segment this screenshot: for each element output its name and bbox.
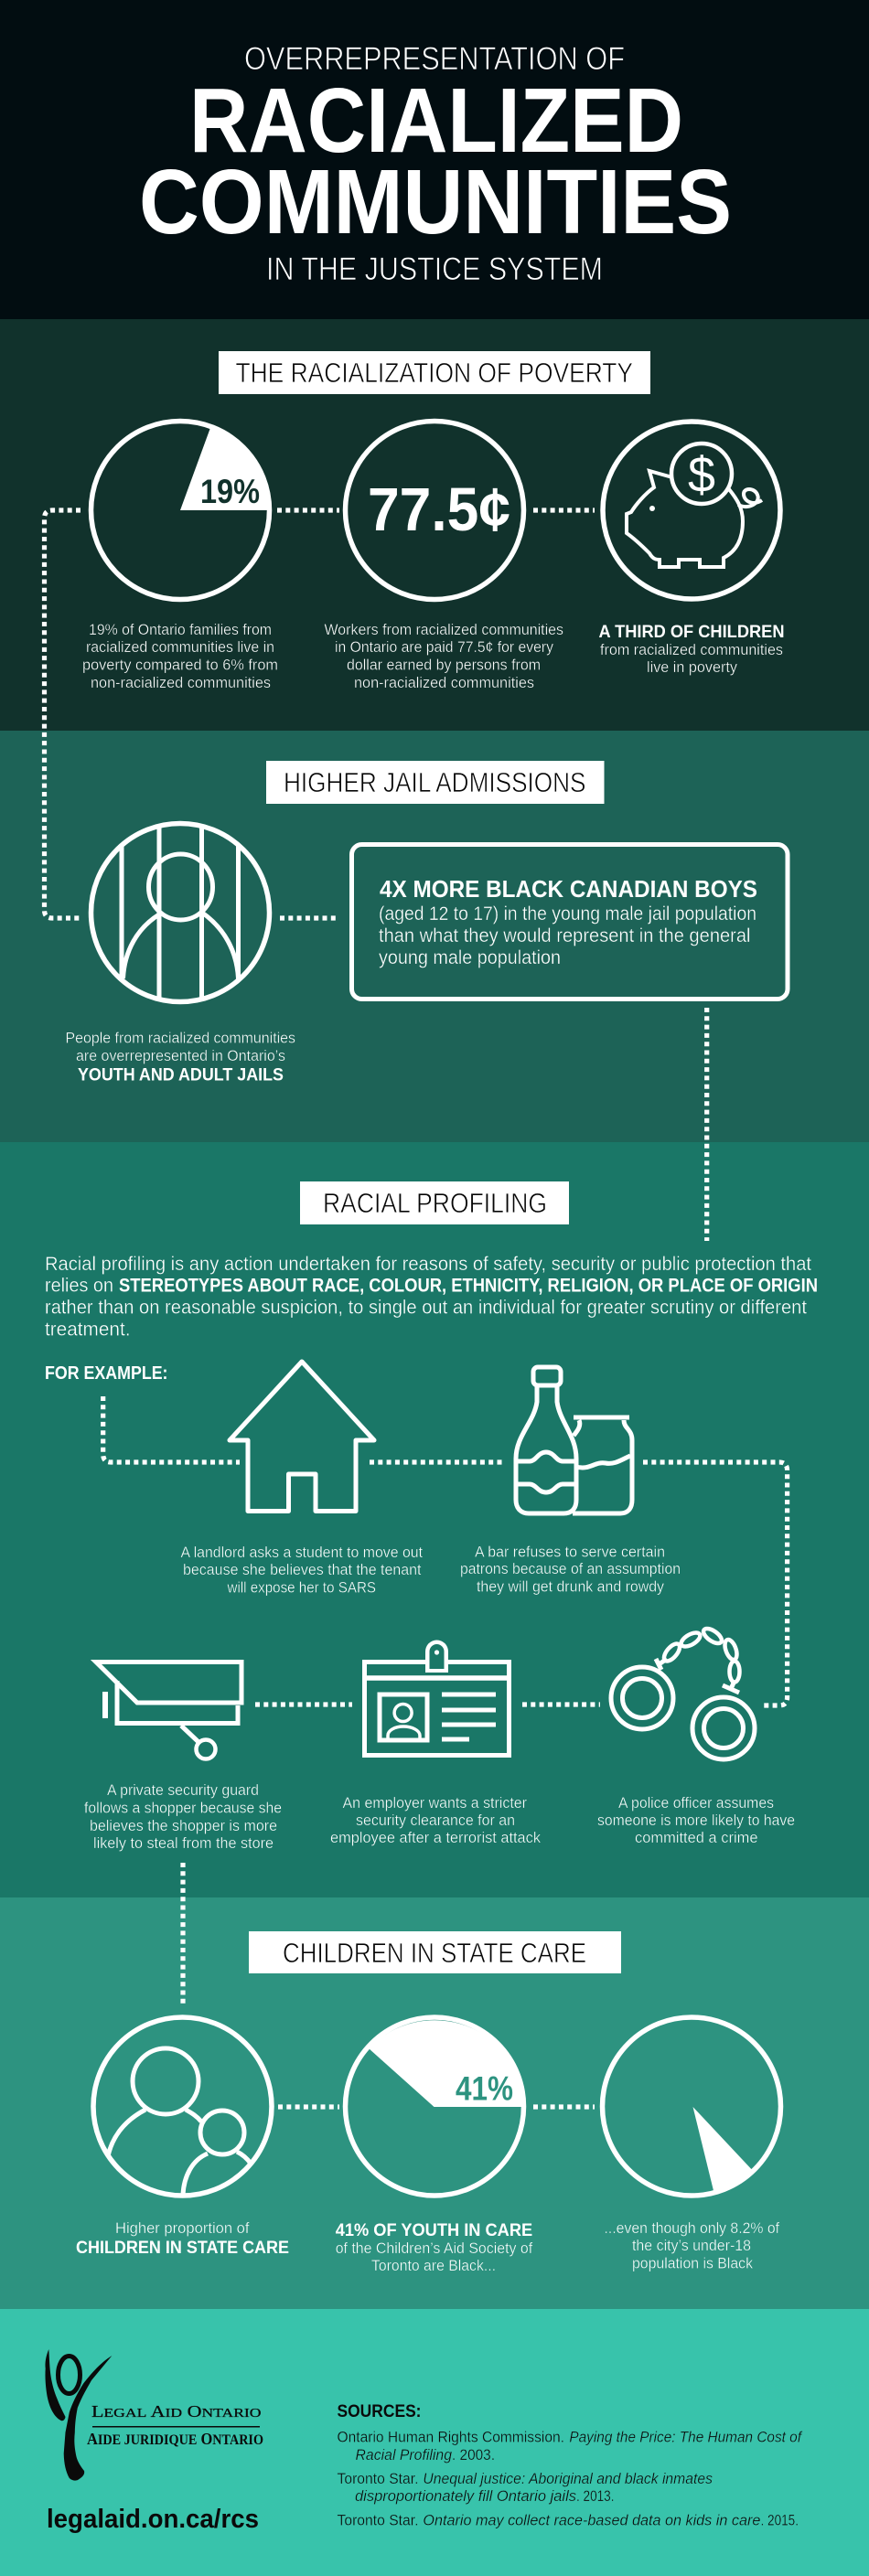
- sources: [337, 2401, 803, 2529]
- text: 41% of youth in care: of the Children’s Aid Society of: [336, 2240, 533, 2257]
- text: children in state care: Higher proportion of: [115, 2220, 250, 2237]
- connector: house to bottles: [370, 1459, 503, 1465]
- icon: parent and child: [93, 2017, 272, 2196]
- text: 19% of families: racialized communities live in: [86, 639, 274, 656]
- icon: piggy bank: [603, 422, 780, 599]
- text: children in state care: [76, 2220, 289, 2258]
- icon: security camera: [96, 1662, 241, 1759]
- text: landlord example: will expose her to SARS: [227, 1580, 376, 1597]
- heading: children in state care: [249, 1931, 621, 1973]
- connector: bottles to handcuffs: [643, 1462, 788, 1705]
- text: employer example: employee after a terrorist attack: [330, 1830, 542, 1846]
- text: security guard example: believes the shopper is more: [90, 1818, 277, 1834]
- text: police officer example: [597, 1795, 795, 1846]
- text: definition of racial profiling: relies on: [45, 1275, 113, 1297]
- connector: [277, 508, 339, 513]
- logo: legal aid ontario: LEGAL A ID O NTARIO: [91, 2402, 262, 2421]
- sources: Racial Profiling: [355, 2447, 453, 2464]
- text: a third of children: [598, 622, 785, 676]
- title: OVERREPRESENTATION OF: [244, 41, 625, 77]
- text: definition of racial profiling: [45, 1254, 818, 1341]
- icon: piggy bank: $: [688, 446, 715, 503]
- connector: [278, 2104, 339, 2110]
- panel: children in state care: [0, 1897, 869, 2309]
- callout: 4x more black canadian boys: than what they would represent in the general: [379, 925, 750, 946]
- sources: . 2013.: [576, 2488, 615, 2505]
- text: employer example: [330, 1795, 542, 1846]
- sources: disproportionately fill Ontario jails: [355, 2488, 576, 2505]
- text: workers paid 77.5 cents: in Ontario are paid 77.5¢ for every: [335, 639, 554, 656]
- icon: bottles: [516, 1367, 632, 1513]
- text: a third of children: live in poverty: [647, 659, 738, 676]
- heading: the racialization of poverty: THE RACIALIZATION OF POVERTY: [236, 357, 633, 389]
- icon: person behind bars: [91, 823, 269, 1002]
- text: overrepresented in jails: [66, 1030, 295, 1085]
- text: landlord example: [181, 1545, 423, 1597]
- sources: Ontario may collect race-based data on kids in care: [423, 2513, 760, 2529]
- title: IN THE JUSTICE SYSTEM: [266, 251, 603, 287]
- connector: [280, 915, 339, 921]
- heading: racial profiling: RACIAL PROFILING: [323, 1187, 547, 1219]
- icon: handcuffs: [611, 1626, 755, 1759]
- text: workers paid 77.5 cents: non-racialized communities: [354, 675, 534, 691]
- heading: higher jail admissions: HIGHER JAIL ADMISSIONS: [284, 766, 585, 798]
- panel: racial profiling: [0, 1142, 869, 1897]
- pie chart: 19%: 19%: [200, 473, 260, 510]
- sources: Unequal justice: Aboriginal and black inmates: [423, 2471, 713, 2487]
- text: 19% of families: [82, 622, 278, 691]
- heading: higher jail admissions: [266, 761, 604, 804]
- pie chart: 8.2%: [602, 2017, 781, 2196]
- text: a third of children: A THIRD OF CHILDREN: [598, 622, 785, 642]
- heading: children in state care: CHILDREN IN STATE CARE: [283, 1937, 586, 1969]
- text: security guard example: [84, 1782, 282, 1852]
- callout: 4x more black canadian boys: 4X MORE BLACK CANADIAN BOYS: [380, 875, 757, 903]
- sources: . 2003.: [452, 2447, 495, 2464]
- text: definition of racial profiling: treatment.: [45, 1319, 130, 1341]
- text: 19% of families: non-racialized communities: [91, 675, 271, 691]
- icon: id badge: [364, 1641, 509, 1756]
- heading: racial profiling: [300, 1181, 569, 1224]
- sources: Toronto Star.: [337, 2471, 419, 2487]
- callout: 4x more black canadian boys: [351, 845, 788, 999]
- logo: legal aid ontario: [45, 2349, 263, 2481]
- text: employer example: security clearance for an: [356, 1812, 515, 1829]
- text: 8.2% of under-18 population: ...even though only 8.2% of: [604, 2220, 779, 2237]
- title: [139, 41, 732, 287]
- text: 19% of families: poverty compared to 6% from: [82, 657, 278, 673]
- text: landlord example: A landlord asks a student to move out: [181, 1545, 423, 1561]
- connector: to house: [103, 1396, 240, 1462]
- callout: 4x more black canadian boys: (aged 12 to 17) in the young male jail population: [379, 903, 756, 925]
- pie chart: 41%: [346, 2017, 526, 2196]
- text: a third of children: from racialized communities: [600, 642, 783, 658]
- connector: camera to badge: [255, 1702, 352, 1707]
- sources: SOURCES:: [337, 2401, 421, 2421]
- heading: the racialization of poverty: [219, 351, 650, 394]
- pie chart: 19%: [91, 421, 272, 600]
- text: police officer example: committed a crime: [635, 1830, 757, 1846]
- callout: 4x more black canadian boys: young male population: [379, 947, 561, 968]
- text: 41% of youth in care: [336, 2220, 533, 2274]
- panel: higher jail admissions: [0, 731, 869, 1142]
- text: 41% of youth in care: Toronto are Black...: [371, 2258, 496, 2274]
- connector: [533, 508, 595, 513]
- connector: jail admissions to racial profiling: [704, 1008, 709, 1241]
- text: overrepresented in jails: YOUTH AND ADULT JAILS: [78, 1064, 284, 1085]
- text: overrepresented in jails: are overrepresented in Ontario’s: [76, 1048, 285, 1064]
- text: workers paid 77.5 cents: [324, 622, 563, 691]
- text: 19% of families: 19% of Ontario families from: [89, 622, 272, 638]
- pie chart: 41%: 41%: [456, 2070, 513, 2107]
- connector: poverty to jail admissions: [44, 510, 82, 918]
- icon: house: [230, 1362, 374, 1511]
- text: definition of racial profiling: rather than on reasonable suspicion, to single out an individual for greater scrutiny or different: [45, 1297, 807, 1319]
- text: bar example: patrons because of an assumption: [460, 1561, 681, 1577]
- text: overrepresented in jails: People from racialized communities: [66, 1030, 295, 1046]
- text: bar example: [460, 1544, 681, 1595]
- link: website: legalaid.on.ca/rcs: [47, 2505, 259, 2534]
- connector: [533, 2104, 595, 2110]
- panel: footer: [0, 2309, 869, 2576]
- text: definition of racial profiling: Racial profiling is any action undertaken for reasons of safety, security or public protection that: [45, 1254, 811, 1275]
- title: RACIALIZED: [189, 69, 683, 172]
- sources: Ontario Human Rights Commission.: [337, 2429, 564, 2445]
- text: workers paid 77.5 cents: dollar earned by persons from: [347, 657, 541, 673]
- text: 8.2% of under-18 population: the city’s under-18: [632, 2238, 751, 2254]
- sources: Toronto Star.: [337, 2513, 419, 2529]
- text: employer example: An employer wants a stricter: [342, 1795, 527, 1812]
- text: police officer example: someone is more likely to have: [597, 1812, 795, 1829]
- stat circle: 77.5 cents: [346, 421, 523, 600]
- text: landlord example: because she believes that the tenant: [183, 1562, 422, 1578]
- connector: badge to handcuffs: [522, 1702, 600, 1707]
- title: COMMUNITIES: [139, 151, 732, 253]
- text: 8.2% of under-18 population: population is Black: [632, 2255, 754, 2271]
- text: security guard example: follows a shopper because she: [84, 1800, 282, 1816]
- text: bar example: they will get drunk and rowdy: [477, 1578, 665, 1595]
- connector: racial profiling to state care: [180, 1863, 186, 2005]
- text: security guard example: likely to steal from the store: [93, 1835, 274, 1852]
- text: workers paid 77.5 cents: Workers from racialized communities: [324, 622, 563, 638]
- sources: Paying the Price: The Human Cost of: [569, 2429, 803, 2445]
- text: 8.2% of under-18 population: [604, 2220, 779, 2271]
- stat circle: 77.5 cents: 77.5¢: [368, 476, 510, 544]
- text: 41% of youth in care: 41% OF YOUTH IN CARE: [336, 2220, 532, 2240]
- panel: the racialization of poverty: [0, 319, 869, 731]
- label: for example: FOR EXAMPLE:: [45, 1363, 168, 1384]
- sources: . 2015.: [761, 2513, 799, 2529]
- panel: header: [0, 0, 869, 319]
- text: security guard example: A private security guard: [107, 1782, 259, 1799]
- text: police officer example: A police officer assumes: [618, 1795, 774, 1812]
- text: children in state care: CHILDREN IN STATE CARE: [76, 2238, 289, 2258]
- text: bar example: A bar refuses to serve certain: [475, 1544, 665, 1560]
- logo: legal aid ontario: AIDE JURIDIQUE ONTARIO: [87, 2430, 263, 2448]
